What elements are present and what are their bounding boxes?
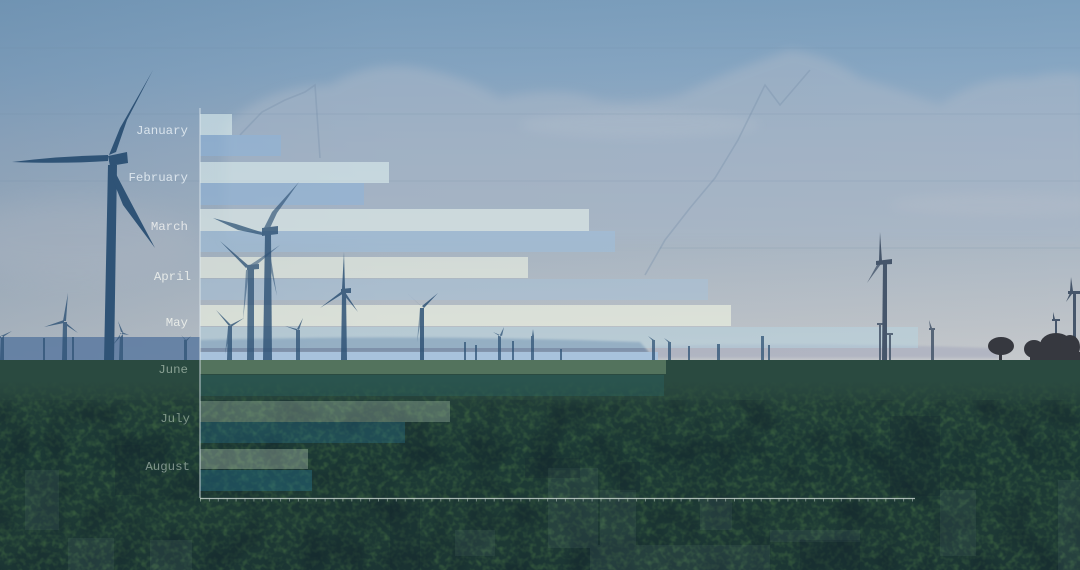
horizon haze bbox=[0, 337, 1000, 362]
turbine: small by axis bbox=[285, 318, 303, 360]
x axis with ticks bbox=[200, 498, 915, 500]
label: February: February bbox=[128, 171, 189, 185]
bars: July bbox=[200, 401, 450, 443]
label: July: July bbox=[160, 412, 191, 426]
turbine: centre third bbox=[320, 252, 358, 360]
dark city blocks bbox=[115, 416, 940, 570]
label: June: June bbox=[158, 363, 188, 377]
turbine: centre fourth bbox=[406, 292, 438, 360]
bars: August bbox=[200, 449, 312, 491]
chart lower section and axes bbox=[128, 108, 915, 500]
bars: February bbox=[200, 162, 389, 205]
turbine: far right bbox=[1052, 277, 1080, 360]
y axis bbox=[199, 108, 201, 498]
right turbines and trees bbox=[867, 232, 1080, 360]
turbine: small centre left bbox=[216, 310, 244, 360]
label: August: August bbox=[145, 460, 190, 474]
turbine: large left bbox=[12, 70, 155, 362]
wind turbines bbox=[0, 70, 770, 362]
darker left sky tint bbox=[0, 0, 1080, 362]
turbine: centre tall bbox=[213, 182, 299, 360]
label: April: April bbox=[154, 270, 191, 284]
turbine: small left bbox=[44, 293, 78, 360]
trees bbox=[988, 333, 1080, 360]
faint city overlay bbox=[25, 468, 1080, 570]
ground field bbox=[0, 360, 1080, 570]
bar chart bars bbox=[200, 114, 918, 348]
sky background bbox=[0, 0, 1080, 362]
clouds bbox=[0, 50, 1080, 280]
bars: March bbox=[200, 209, 615, 252]
distant turbines row bbox=[0, 321, 770, 360]
bars: January bbox=[200, 114, 281, 156]
turbine: right small group bbox=[877, 320, 935, 360]
faint background line chart bbox=[240, 70, 810, 275]
turbine: centre second bbox=[220, 241, 280, 360]
label: March: March bbox=[151, 220, 188, 234]
label: January: January bbox=[136, 124, 189, 138]
bars: April bbox=[200, 257, 708, 300]
label: May: May bbox=[166, 316, 189, 330]
bars: May bbox=[200, 305, 918, 348]
bars: June bbox=[200, 360, 666, 396]
turbine: right tall bbox=[867, 232, 892, 360]
faint scan lines bbox=[0, 48, 1080, 248]
month labels bbox=[128, 124, 191, 474]
